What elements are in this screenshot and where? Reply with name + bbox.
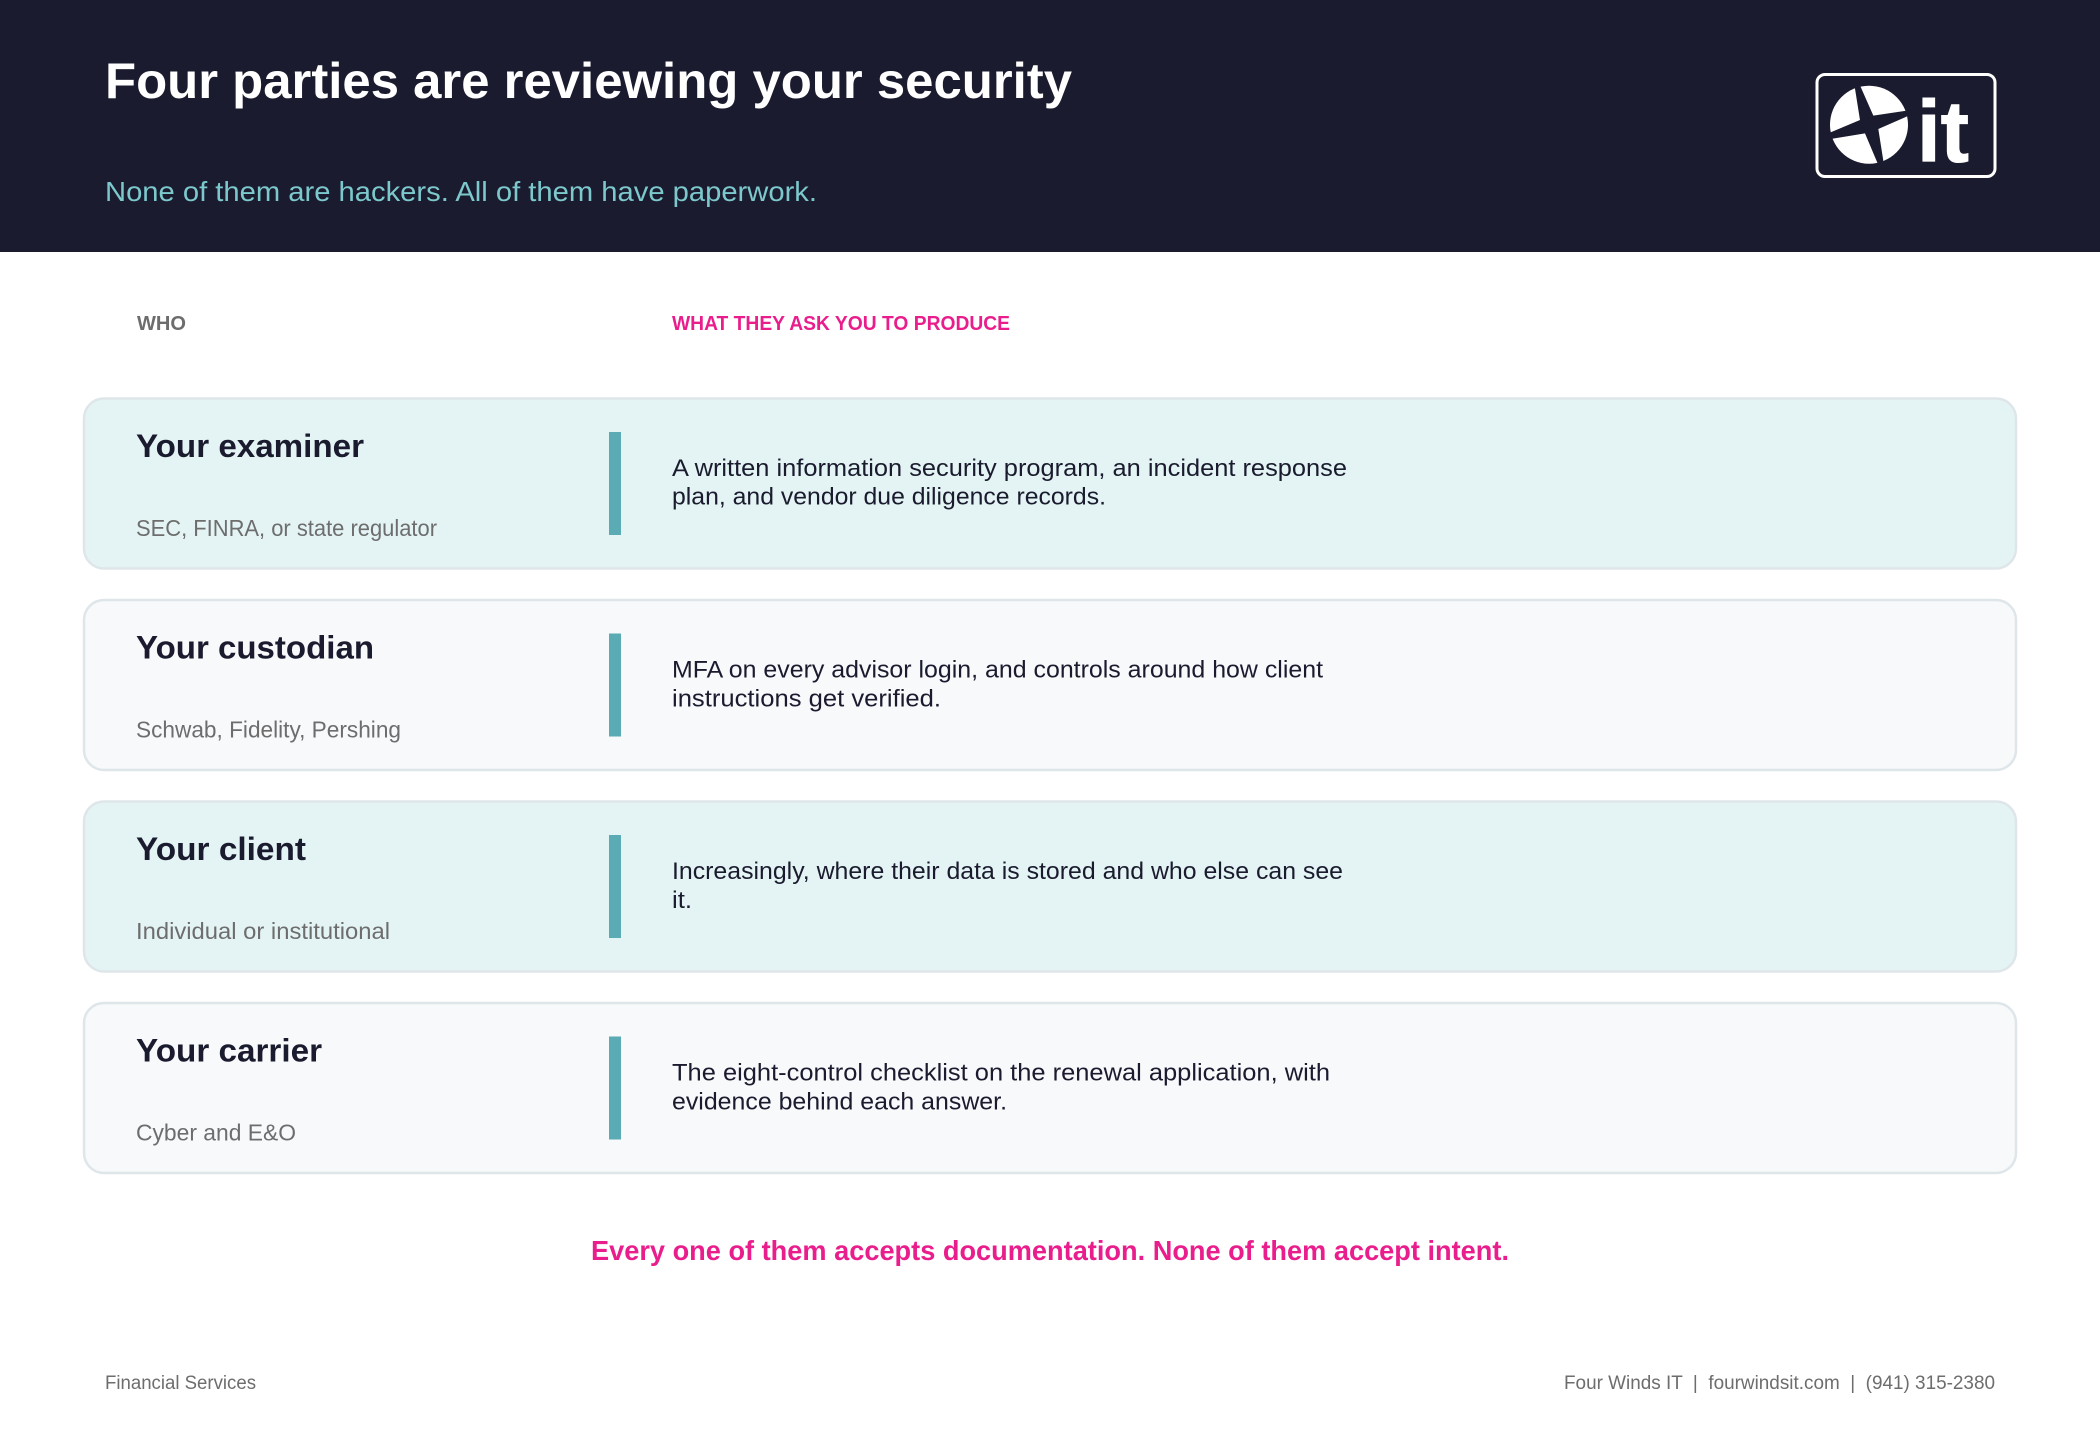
closing callout: Every one of them accepts documentation. None of them accept intent. [591,1235,1509,1266]
party detail: Schwab, Fidelity, Pershing [136,716,401,742]
request text: instructions get verified. [672,686,941,712]
request text: Increasingly, where their data is stored and who else can see [672,858,1343,885]
logo: Four Winds IT [1817,74,1995,180]
party detail: SEC, FINRA, or state regulator [136,515,437,541]
party name: Your client [136,831,306,867]
subtitle: None of them are hackers. All of them have paperwork. [105,176,817,207]
request text: A written information security program, an incident response [672,455,1347,482]
column heading: what they ask you to produce: WHAT THEY ASK YOU TO PRODUCE [672,313,1010,335]
panel: your custodian [84,600,2016,770]
header band [0,0,2100,252]
footer: contact: Four Winds IT | fourwindsit.com | (941) 315-2380 [1564,1373,1995,1394]
accent bar [609,835,621,938]
party detail: Cyber and E&O [136,1120,296,1146]
panel: your client [84,802,2016,972]
panel: your examiner [84,398,2016,568]
party name: Your carrier [136,1032,322,1068]
logo: Four Winds IT: it [1917,84,1969,180]
accent bar [609,432,621,535]
party name: Your custodian [136,630,374,666]
request text: MFA on every advisor login, and controls around how client [672,656,1323,684]
accent bar [609,1036,621,1140]
column heading: who: WHO [137,313,186,335]
request text: it. [672,887,692,914]
accent bar [609,634,621,736]
panel: your carrier [84,1003,2016,1173]
request text: plan, and vendor due diligence records. [672,484,1106,510]
party detail: Individual or institutional [136,918,390,944]
request text: The eight-control checklist on the renewal application, with [672,1060,1330,1086]
footer: category: Financial Services [105,1373,256,1394]
party name: Your examiner [136,428,364,464]
request text: evidence behind each answer. [672,1088,1007,1116]
title: Four parties are reviewing your security [105,53,1072,109]
